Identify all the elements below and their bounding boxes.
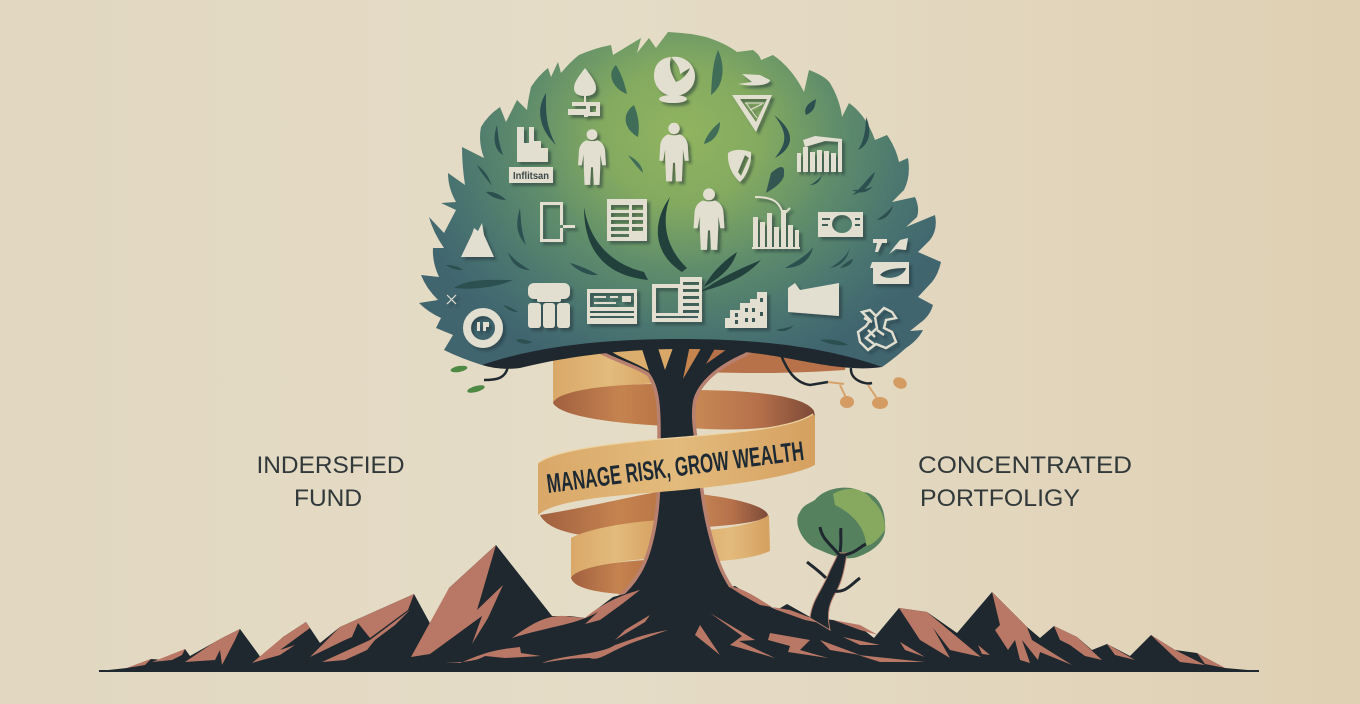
ribbon: back coils behind trunk	[540, 346, 850, 594]
icon: building with label	[509, 127, 553, 183]
left label second line: FUND	[294, 485, 362, 512]
icon: cross	[447, 295, 456, 304]
icon: drop on stand	[568, 68, 600, 117]
icon: mountain	[461, 223, 494, 257]
leaf details	[446, 93, 893, 345]
ribbon: front band with slogan	[538, 414, 815, 515]
icons	[447, 57, 909, 350]
icon: small marks	[873, 238, 908, 254]
icon: shield	[728, 150, 751, 182]
icon: door	[540, 202, 575, 242]
tree canopy	[419, 32, 941, 369]
icon: person right	[694, 188, 724, 250]
icon: person center	[659, 123, 689, 181]
icon: pie globe	[654, 57, 695, 103]
right label second line: PORTFOLIGY	[920, 485, 1080, 512]
icon: backpack	[528, 283, 570, 328]
icon: person left	[578, 129, 606, 185]
tree trunk	[590, 345, 790, 640]
icon: document	[607, 199, 647, 241]
icon: box with fish	[870, 262, 909, 284]
small sapling tree	[797, 488, 885, 630]
canopy underside band	[482, 339, 882, 369]
right label: CONCENTRATED	[918, 452, 1132, 479]
pink facets right	[899, 592, 1225, 668]
pink facets left	[127, 545, 503, 668]
mountains and ground	[99, 545, 1259, 672]
sapling foliage	[797, 488, 885, 558]
icon: box with circle	[818, 212, 863, 237]
icon: ring gauge	[467, 312, 499, 344]
icon: dashboard panel	[587, 289, 637, 324]
left label: INDERSFIED	[256, 452, 404, 479]
trunk notches showing ribbon	[607, 345, 733, 379]
icon: flag panel	[788, 283, 839, 316]
icon: tangled network	[858, 308, 896, 350]
icon: bars with roof	[797, 136, 842, 172]
icon: building block	[652, 277, 702, 322]
icon: dish and cone	[732, 74, 772, 132]
sapling trunk	[810, 553, 847, 630]
icon: bar chart with curve	[752, 197, 800, 249]
main branches	[584, 197, 761, 292]
hanging tendrils and seeds	[450, 355, 909, 409]
icon: building with label: Inflitsan	[513, 171, 549, 182]
slogan: MANAGE RISK, GROW WEALTH	[545, 436, 806, 499]
icon: stepped building	[725, 292, 767, 328]
